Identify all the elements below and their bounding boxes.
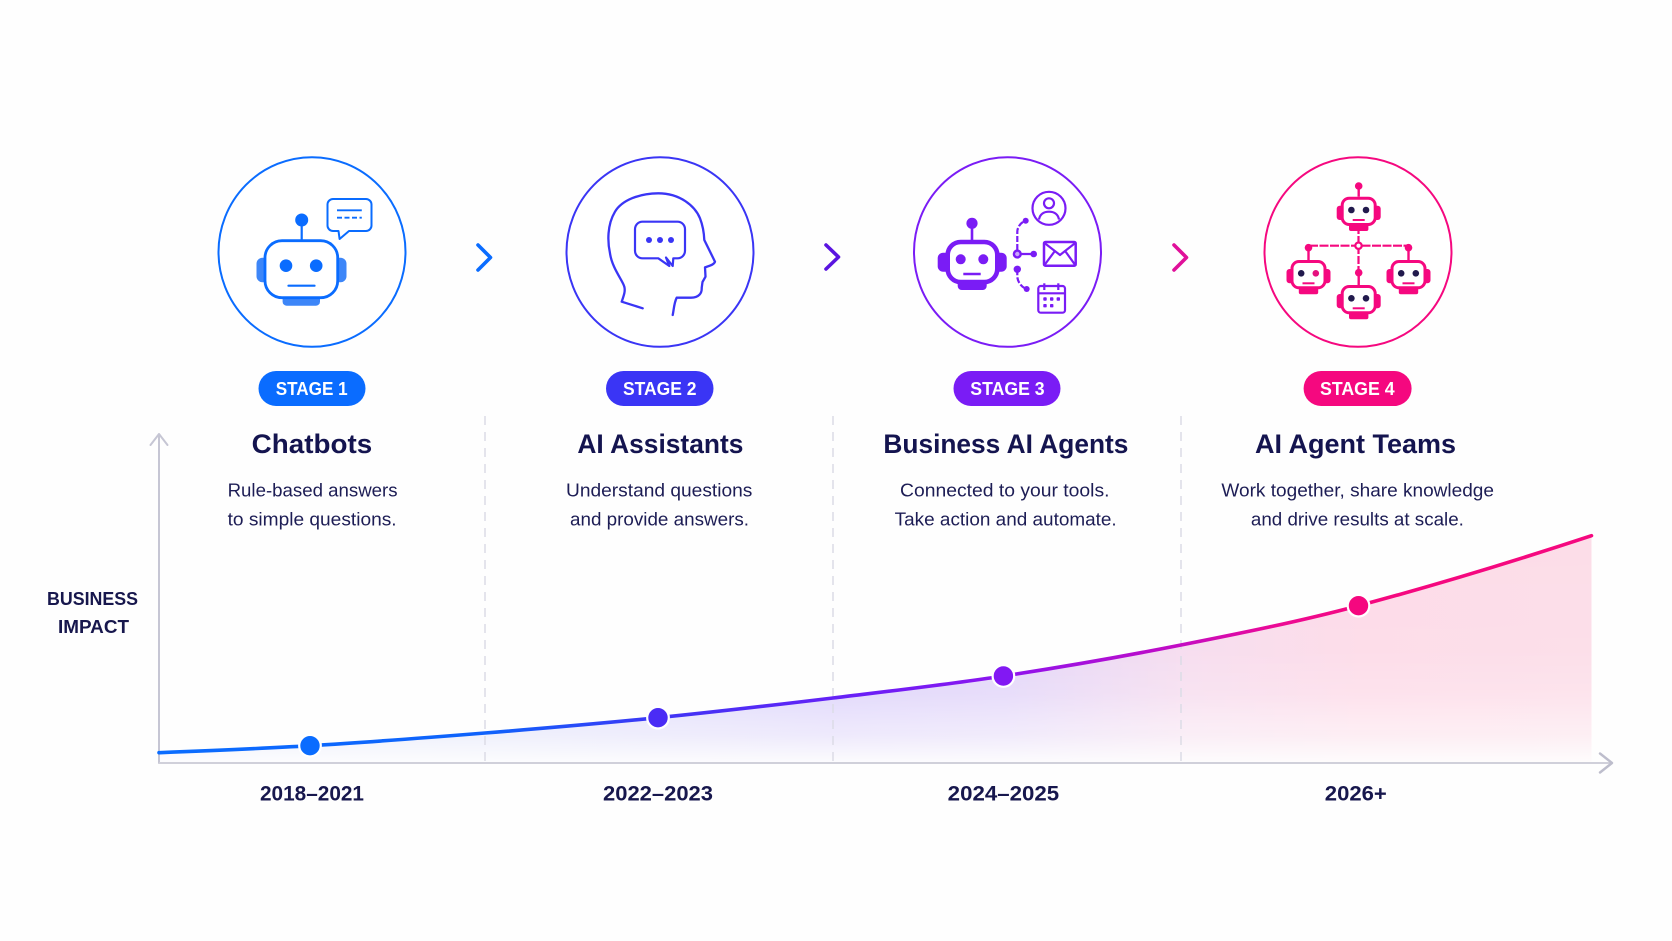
y axis label: IMPACT — [58, 616, 130, 637]
text: business AI agents description: Take action and automate. — [895, 509, 1117, 529]
icon: agent connected to tools in circle — [914, 157, 1101, 347]
arrow: stage 3 to 4 — [1174, 245, 1186, 270]
heading: Chatbots: Chatbots — [252, 429, 372, 459]
arrow: stage 2 to 3 — [826, 245, 838, 269]
heading: Business AI Agents: Business AI Agents — [883, 429, 1128, 459]
growth curve line — [159, 536, 1592, 753]
badge: stage 3: STAGE 3 — [970, 378, 1045, 399]
text: business AI agents description — [895, 481, 1117, 529]
connector: dashed links to tools — [1014, 218, 1037, 292]
heading: AI Assistants: AI Assistants — [577, 429, 743, 459]
badge: stage 1 — [258, 371, 366, 406]
text: AI agent teams description: Work together, share knowledge — [1221, 481, 1494, 501]
icon: envelope — [1044, 242, 1076, 266]
icon: team of agents in circle — [1264, 157, 1452, 347]
text: AI assistants description: and provide answers. — [570, 509, 749, 529]
heading: AI Agent Teams: AI Agent Teams — [1255, 429, 1456, 459]
marker: stage 4 point — [1348, 595, 1369, 616]
text: chatbots description — [228, 481, 398, 529]
y axis label: BUSINESS — [47, 588, 138, 609]
badge: stage 4: STAGE 4 — [1320, 378, 1395, 399]
icon: right robot — [1386, 244, 1430, 294]
arrow: stage 1 to 2 — [478, 245, 490, 270]
badge: stage 1: STAGE 1 — [276, 378, 348, 399]
badge: stage 4 — [1304, 371, 1412, 406]
text: chatbots description: Rule-based answers — [228, 481, 398, 501]
panel: stage 1 chatbots — [218, 157, 406, 529]
icon: agent robot — [938, 218, 1007, 290]
text: AI agent teams description — [1221, 481, 1494, 529]
panel: stage 2 AI assistants — [566, 157, 754, 529]
y axis with arrow — [150, 434, 168, 763]
marker: stage 1 point — [299, 735, 321, 756]
text: business AI agents description: Connected to your tools. — [900, 481, 1110, 501]
panel: stage 4 AI agent teams — [1221, 157, 1494, 529]
connector: team network lines — [1309, 226, 1408, 273]
badge: stage 3 — [954, 371, 1060, 406]
icon: bottom robot — [1337, 269, 1381, 319]
icon: person — [1032, 192, 1066, 225]
x axis label: 2022–2023: 2022–2023 — [603, 783, 713, 806]
text: chatbots description: to simple questions. — [228, 509, 397, 529]
x axis line — [159, 762, 1610, 764]
text: AI assistants description — [566, 481, 752, 529]
chart: business impact growth curve — [47, 416, 1612, 806]
x axis arrowhead — [1600, 754, 1612, 772]
chart area fill — [326, 538, 1592, 754]
badge: stage 2: STAGE 2 — [623, 378, 696, 399]
icon: left robot — [1286, 244, 1330, 294]
x axis label: 2026+: 2026+ — [1325, 783, 1387, 806]
marker: stage 2 point — [647, 707, 669, 728]
panel: stage 3 business AI agents — [883, 157, 1128, 529]
x axis label: 2018–2021: 2018–2021 — [260, 783, 364, 806]
x axis label: 2024–2025: 2024–2025 — [948, 783, 1059, 806]
icon: top robot — [1337, 182, 1381, 231]
dashed column dividers — [485, 416, 1181, 762]
text: AI agent teams description: and drive results at scale. — [1251, 509, 1464, 529]
y axis label — [47, 588, 138, 637]
badge: stage 2 — [606, 371, 714, 406]
icon: chatbot in circle — [218, 157, 406, 347]
text: AI assistants description: Understand questions — [566, 481, 752, 501]
icon: calendar — [1038, 283, 1065, 313]
marker: stage 3 point — [993, 665, 1014, 687]
icon: head with speech bubble in circle — [566, 157, 754, 347]
